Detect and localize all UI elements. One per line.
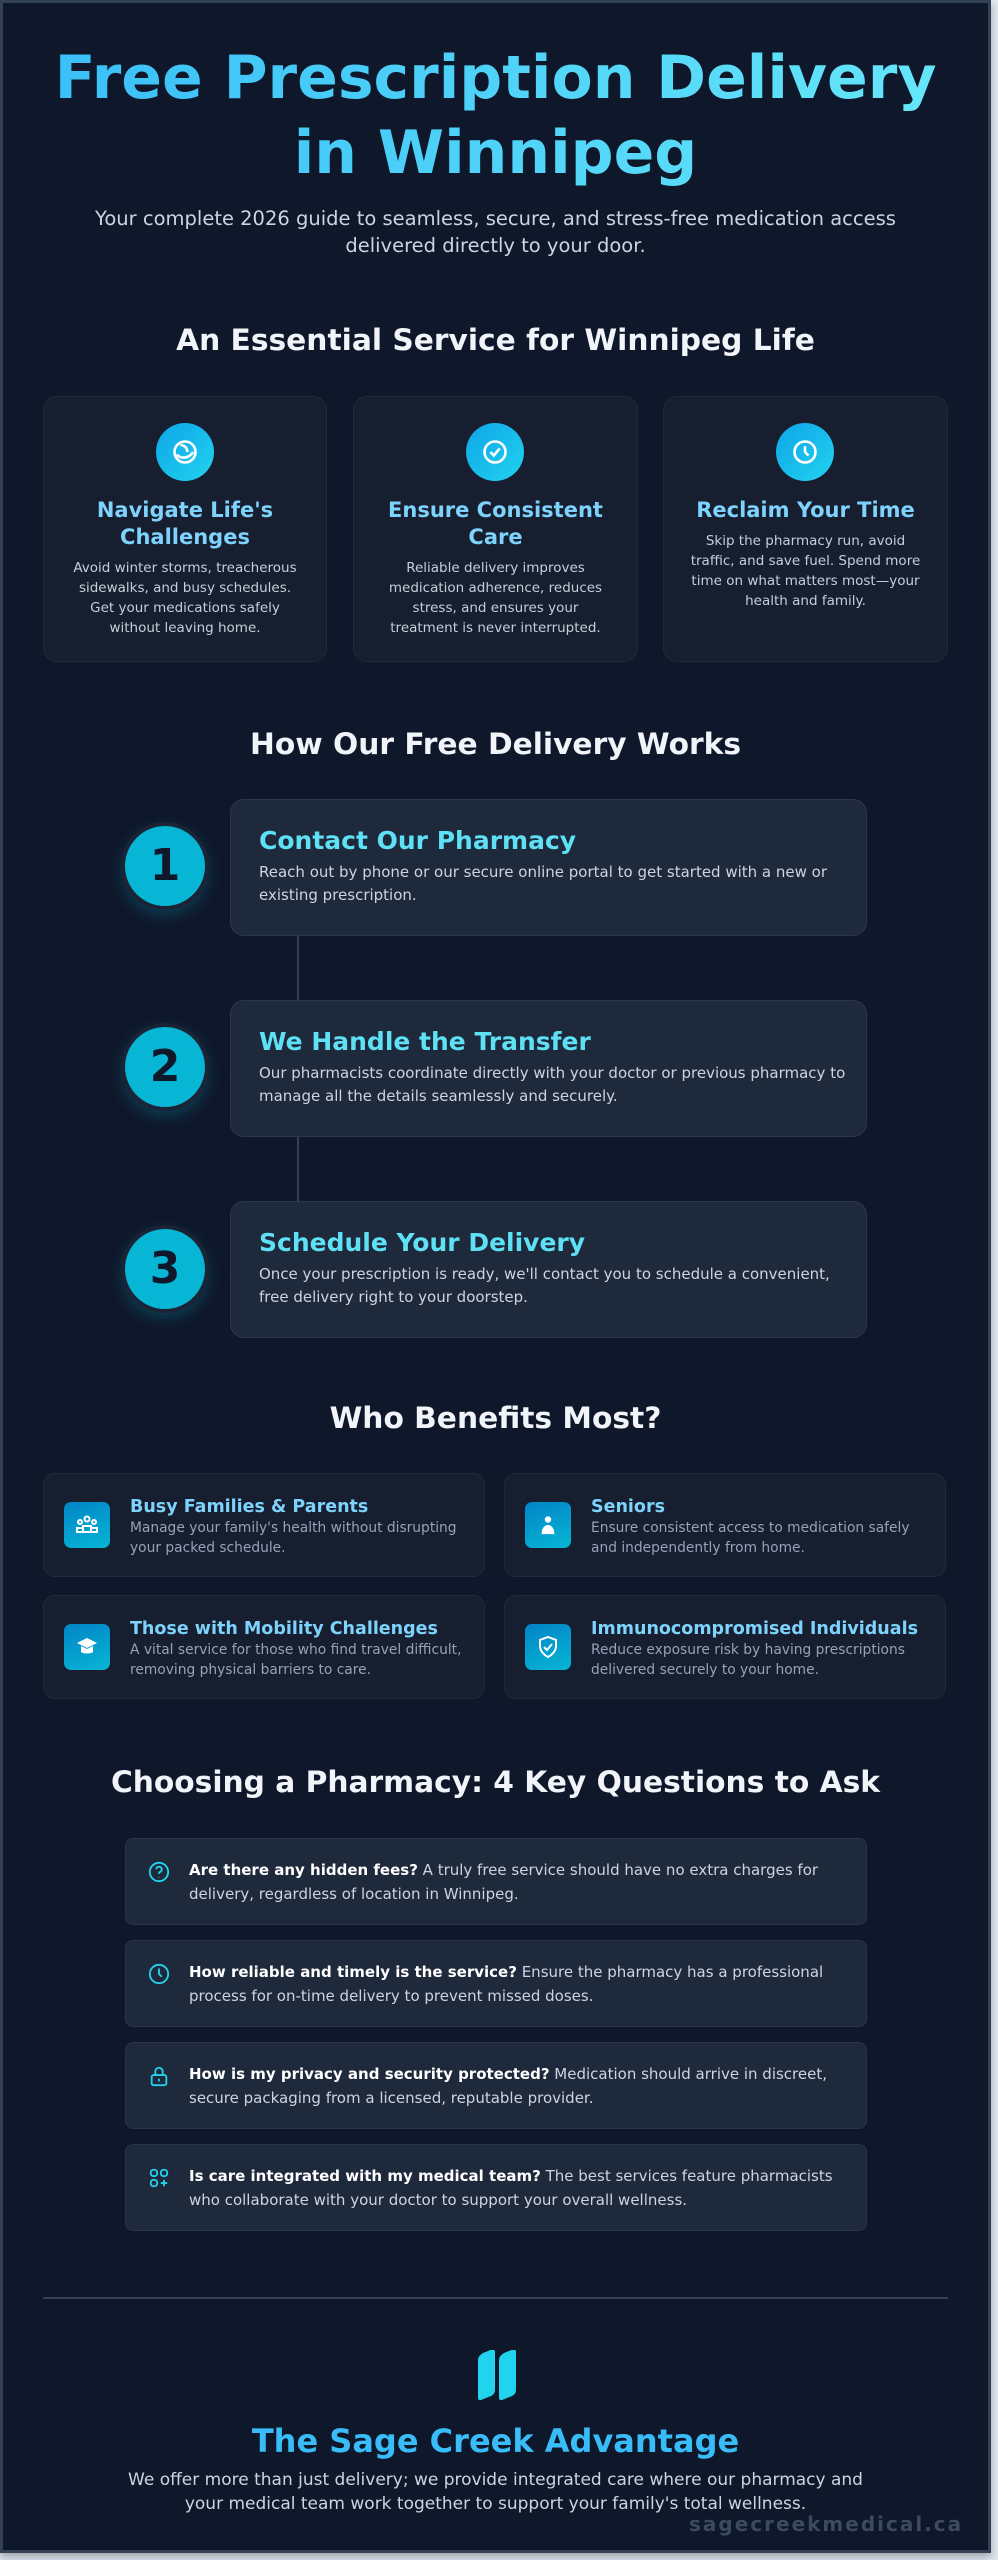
icon: grid [150,2168,168,2188]
icon: check [466,423,524,481]
step text: Reach out by phone or our secure online portal to get started with a new or existing prescription. [259,863,827,904]
question 3 [125,2042,867,2129]
connector [297,934,299,1000]
text: Are there any hidden fees? A truly free service should have no extra charges for delivery, regardless of location in Winnipeg. [189,1861,818,1903]
icon: mobility [64,1624,110,1670]
step 3 card [230,1201,867,1338]
icon: person [525,1502,571,1548]
icon: globe [156,423,214,481]
icon: clock [148,1964,170,1984]
icon: clock [776,423,834,481]
step title: Contact Our Pharmacy [259,826,576,855]
heading: choosing a pharmacy: Choosing a Pharmacy: 4 Key Questions to Ask [111,1765,880,1800]
icon: family [64,1502,110,1548]
panel: seniors [504,1473,946,1577]
title: Those with Mobility Challenges [130,1619,438,1639]
icon: shield [525,1624,571,1670]
connector [297,1135,299,1201]
question 4 [125,2144,867,2231]
footer title: The Sage Creek Advantage [252,2422,739,2460]
card title: Navigate Life's [97,498,273,522]
panel: navigate [43,396,327,662]
panel: reclaim time [663,396,948,662]
card title: Ensure Consistent [388,498,603,522]
text: Manage your family's health without disrupting your packed schedule. [130,1520,457,1556]
card title: Challenges [120,525,250,549]
step title: We Handle the Transfer [259,1027,591,1056]
text: How is my privacy and security protected? Medication should arrive in discreet, secure packaging from a licensed, reputable provider. [189,2065,827,2107]
panel: mobility [43,1595,485,1699]
question 2 [125,1940,867,2027]
heading: how it works: How Our Free Delivery Works [250,727,741,762]
text: Ensure consistent access to medication safely and independently from home. [591,1520,910,1556]
text: Is care integrated with my medical team? The best services feature pharmacists who collaborate with your doctor to support your overall wellness. [189,2167,833,2209]
text: A vital service for those who find travel difficult, removing physical barriers to care. [130,1642,461,1678]
step 3 number [125,1229,205,1309]
card text: Skip the pharmacy run, avoid traffic, and save fuel. Spend more time on what matters most—your health and family. [691,533,920,609]
title: Seniors [591,1497,665,1517]
card title: Reclaim Your Time [696,498,915,522]
heading: who benefits: Who Benefits Most? [330,1401,661,1436]
step text: Our pharmacists coordinate directly with your doctor or previous pharmacy to manage all the details seamlessly and securely. [259,1064,845,1105]
icon: lock [150,2066,168,2086]
panel: families [43,1473,485,1577]
title [3,41,988,191]
text: How reliable and timely is the service? Ensure the pharmacy has a professional process for on-time delivery to prevent missed doses. [189,1963,823,2005]
panel: immunocompromised [504,1595,946,1699]
step 1 number: 1 [150,840,180,891]
question 1 [125,1838,867,1925]
card title: Care [468,525,523,549]
step 2 card [230,1000,867,1137]
card title [97,498,273,549]
step 1 card [230,799,867,936]
icon: logo [478,2350,516,2400]
watermark: sagecreekmedical.ca [689,2512,963,2536]
card text: Avoid winter storms, treacherous sidewalks, and busy schedules. Get your medications safely without leaving home. [73,560,297,636]
title: in Winnipeg [294,118,697,188]
step 2 number [125,1027,205,1107]
subtitle: Your complete 2026 guide to seamless, secure, and stress-free medication access delivered directly to your door. [95,207,896,257]
step 3 number: 3 [150,1243,180,1294]
step title: Schedule Your Delivery [259,1228,585,1257]
title: Busy Families & Parents [130,1497,368,1517]
title: Immunocompromised Individuals [591,1619,918,1639]
step 1 number [125,826,205,906]
title: Free Prescription Delivery [55,43,936,113]
footer text: We offer more than just delivery; we provide integrated care where our pharmacy and your medical team work together to support your family's total wellness. [128,2470,863,2514]
icon: question [148,1862,170,1882]
text: Reduce exposure risk by having prescriptions delivered securely to your home. [591,1642,905,1678]
heading: essential service: An Essential Service for Winnipeg Life [176,323,815,358]
card title [388,498,603,549]
step text: Once your prescription is ready, we'll contact you to schedule a convenient, free delivery right to your doorstep. [259,1265,830,1306]
step 2 number: 2 [150,1041,180,1092]
card text: Reliable delivery improves medication adherence, reduces stress, and ensures your treatment is never interrupted. [389,560,602,636]
panel: consistent care [353,396,638,662]
